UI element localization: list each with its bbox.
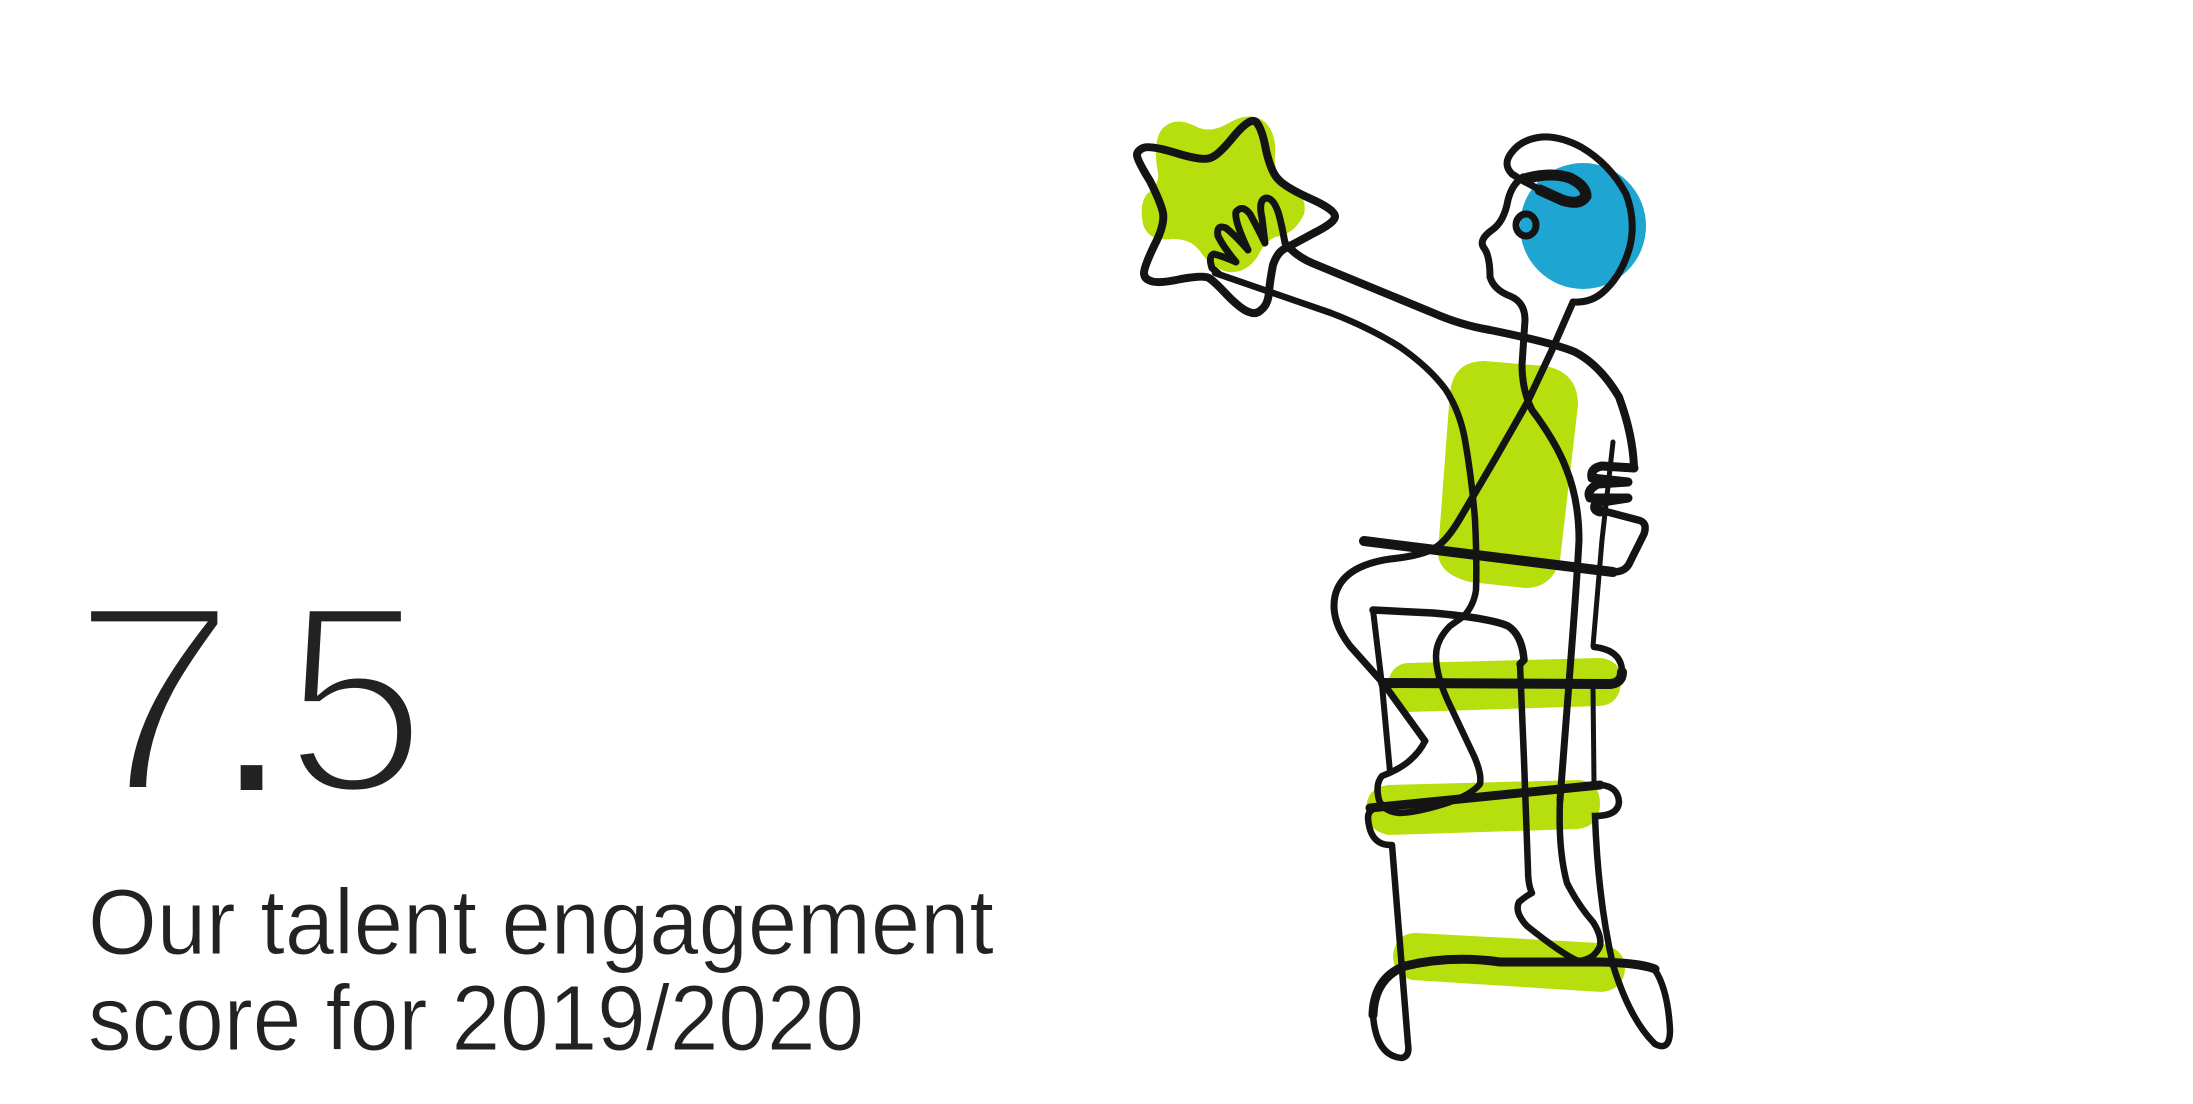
- stool seat: [1383, 672, 1622, 684]
- blue head circle: [1520, 163, 1646, 289]
- star outline: [1137, 121, 1335, 313]
- score number: [70, 548, 427, 850]
- waist bar and forearm: [1364, 541, 1613, 572]
- thigh top and chair seat back line: [1373, 610, 1524, 664]
- green foot bar: [1393, 933, 1625, 992]
- back leg and foot line: [1518, 664, 1600, 961]
- illustration: person on stool holding a star: [1137, 116, 1670, 1058]
- score number: 7: [70, 548, 238, 849]
- caption text: score for 2019/2020: [88, 966, 864, 1070]
- caption text: Our talent engagement: [88, 870, 994, 974]
- score number: .: [214, 549, 289, 850]
- hand on post: [1589, 466, 1634, 512]
- green torso panel: [1438, 361, 1578, 588]
- stool foot rung: [1373, 959, 1655, 1015]
- score number: 5: [284, 548, 427, 849]
- thigh, back and head line: [1334, 137, 1632, 800]
- green rung bar: [1366, 780, 1600, 835]
- lower arm and front leg line: [1215, 273, 1480, 813]
- hand fingers on star: [1210, 198, 1285, 274]
- green star blob: [1142, 116, 1305, 272]
- chair back post: [1373, 610, 1390, 772]
- eye: [1516, 214, 1536, 236]
- hair loop emphasis: [1528, 175, 1586, 202]
- stool middle rung: [1370, 785, 1600, 808]
- stool rear post lower: [1593, 688, 1594, 782]
- stool rear post: [1593, 442, 1613, 646]
- caption text: [88, 870, 994, 1070]
- upper arm line: [1287, 245, 1634, 468]
- stool front leg: [1368, 808, 1408, 1058]
- green seat bar: [1388, 658, 1621, 712]
